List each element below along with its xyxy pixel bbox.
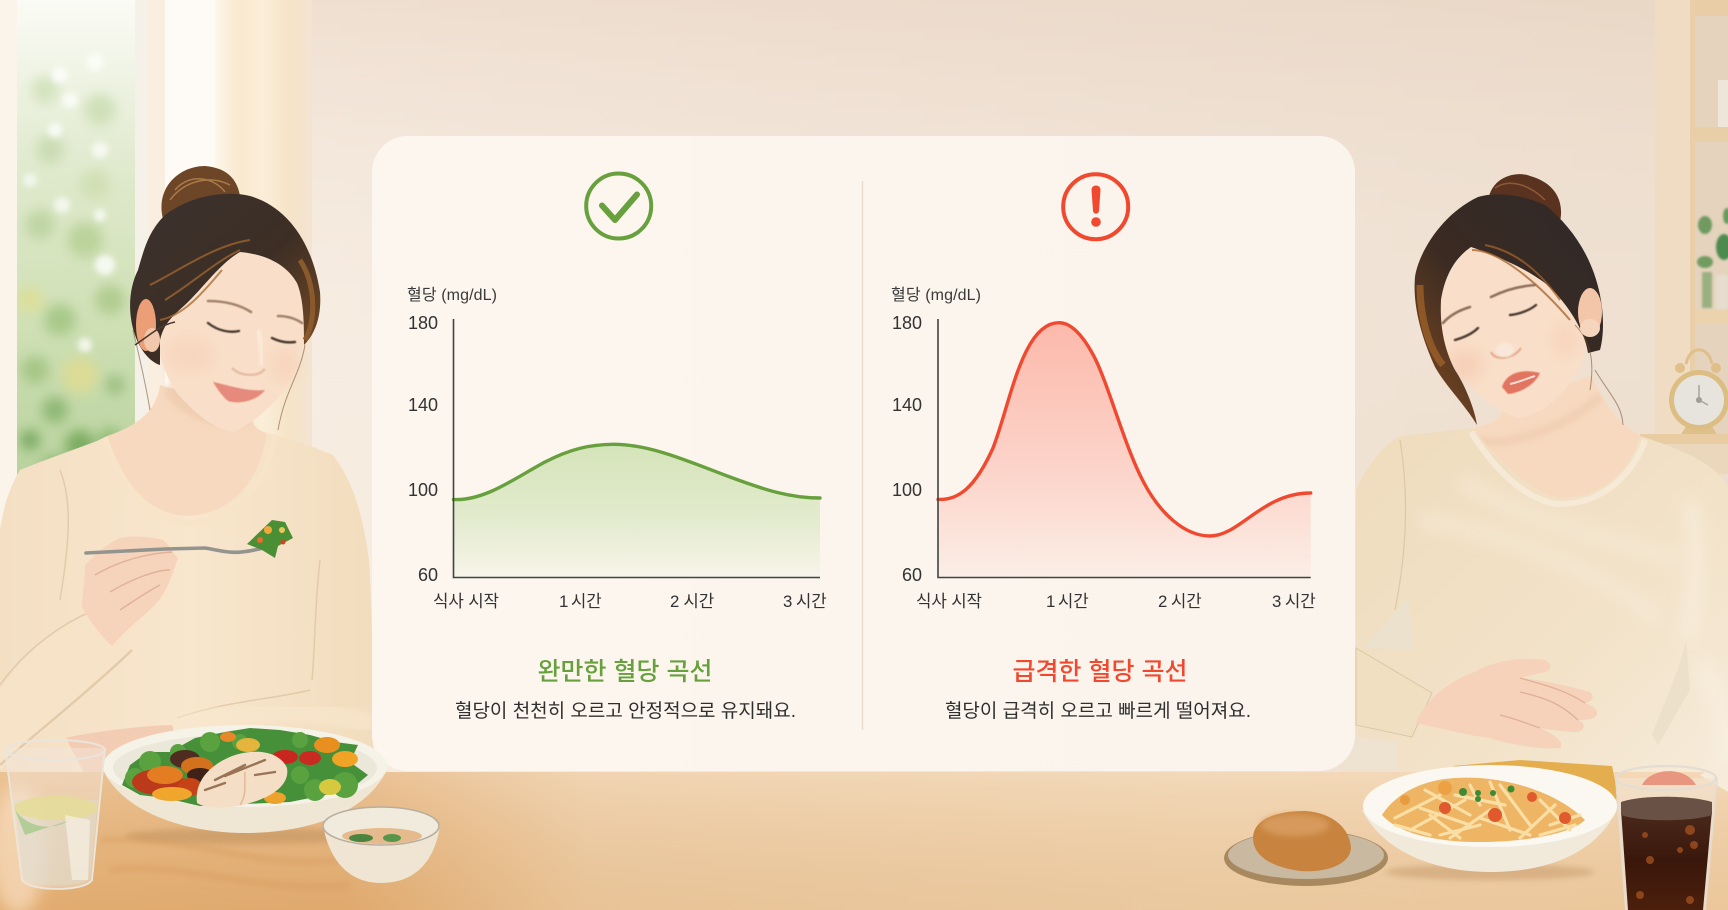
line chart: gentle curve: 2시간 xyxy=(670,592,714,611)
heading: sharp curve: 급격한 혈당 곡선 xyxy=(1013,658,1187,686)
head xyxy=(130,166,320,432)
shelf and clock xyxy=(1640,0,1728,474)
bread on plate xyxy=(1224,811,1388,886)
panel: gentle curve xyxy=(407,174,827,722)
hair bun xyxy=(162,166,241,225)
chest xyxy=(1473,375,1640,498)
caption: sharp curve: 혈당이 급격히 오르고 빠르게 떨어져요. xyxy=(945,700,1251,722)
cola glass xyxy=(1616,766,1717,910)
brows and eyes xyxy=(208,301,302,323)
line chart: gentle curve xyxy=(408,313,827,611)
line chart: sharp curve: 100 xyxy=(892,480,922,500)
icon: check mark xyxy=(586,174,651,238)
salad plate xyxy=(103,725,387,844)
line chart: sharp curve xyxy=(892,313,1316,611)
water glass xyxy=(5,740,105,889)
lips xyxy=(1502,371,1540,394)
panel: sharp curve xyxy=(891,174,1316,722)
axis title: 혈당 (mg/dL) xyxy=(407,286,497,304)
hair bun xyxy=(1488,174,1561,222)
nose xyxy=(1491,348,1521,358)
line chart: sharp curve: 60 xyxy=(902,565,922,585)
woman with stomach ache xyxy=(1343,174,1728,795)
woman eating calmly xyxy=(0,166,380,780)
neck and chest xyxy=(107,385,267,516)
sweater xyxy=(0,433,380,780)
sauce bowl xyxy=(323,807,440,883)
nose xyxy=(232,368,265,375)
hand holding fork xyxy=(82,520,293,646)
line chart: sharp curve: 3시간 xyxy=(1272,592,1316,611)
fork xyxy=(86,548,263,553)
brows and eyes xyxy=(1443,285,1535,323)
line chart: sharp curve: 식사 시작 xyxy=(916,592,982,611)
cushion patches xyxy=(1362,598,1415,650)
line chart: gentle curve: 60 xyxy=(418,565,438,585)
pasta xyxy=(1382,778,1585,842)
heading: gentle curve: 완만한 혈당 곡선 xyxy=(538,658,712,686)
window with garden view xyxy=(0,0,312,780)
lips xyxy=(213,382,265,402)
line chart: sharp curve: 2시간 xyxy=(1158,592,1202,611)
line chart: gentle curve: 140 xyxy=(408,395,438,415)
line chart: sharp curve: 140 xyxy=(892,395,922,415)
lower hand xyxy=(66,725,178,776)
hair xyxy=(130,194,320,365)
hand on belly xyxy=(1416,659,1597,748)
pasta plate xyxy=(1362,765,1617,880)
ear xyxy=(136,299,156,351)
line chart: gentle curve: 1시간 xyxy=(559,592,602,611)
axis title: 혈당 (mg/dL) xyxy=(891,286,981,304)
clothing in front of table edge xyxy=(1453,760,1728,800)
chicken xyxy=(197,752,287,808)
head xyxy=(1415,174,1623,425)
sweater xyxy=(1356,428,1728,795)
sleeve cuff xyxy=(1356,648,1432,737)
icon: warning xyxy=(1063,174,1128,239)
icon: alarm clock xyxy=(1669,350,1728,436)
icon: potted plant xyxy=(1697,208,1728,309)
line chart: gentle curve: 식사 시작 xyxy=(433,592,499,611)
salad xyxy=(122,728,368,808)
line chart: sharp curve: 180 xyxy=(892,313,922,333)
panel: blood sugar comparison xyxy=(372,136,1355,771)
caption: gentle curve: 혈당이 천천히 오르고 안정적으로 유지돼요. xyxy=(455,700,796,722)
line chart: gentle curve: 100 xyxy=(408,480,438,500)
wooden table xyxy=(0,772,1728,910)
hair xyxy=(1415,194,1603,425)
food on fork xyxy=(247,520,293,558)
line chart: gentle curve: 3시간 xyxy=(783,592,827,611)
ear xyxy=(1578,288,1602,336)
line chart: gentle curve: 180 xyxy=(408,313,438,333)
line chart: sharp curve: 1시간 xyxy=(1046,592,1089,611)
